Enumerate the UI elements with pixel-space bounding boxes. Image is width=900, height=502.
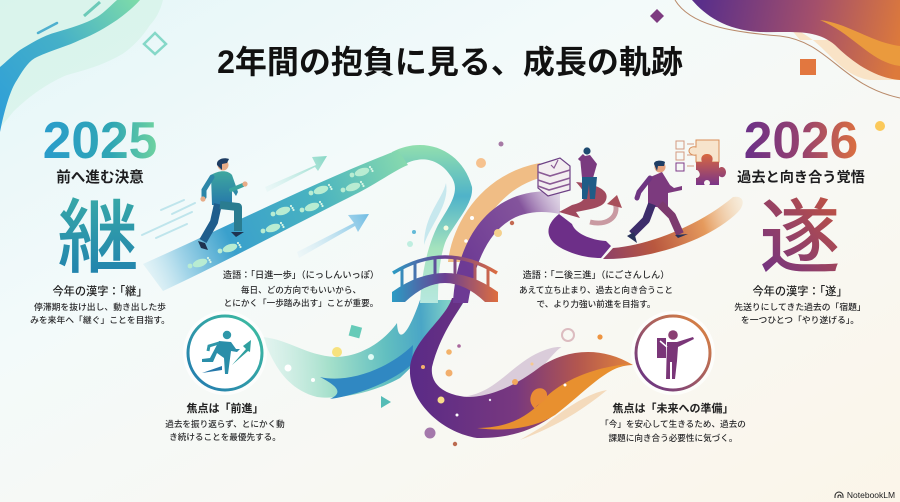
kanji note 2026 xyxy=(734,284,866,325)
text: focus preparation: 課題に向き合う必要性に気づく。 xyxy=(609,432,737,443)
small return arrow xyxy=(590,202,616,223)
text: idiom 2025: 毎日、どの方向でもいいから、 xyxy=(241,284,361,295)
footprints xyxy=(188,166,374,269)
text: idiom 2025: とにかく「一歩踏み出す」ことが重要。 xyxy=(224,297,378,308)
ribbon wisp xyxy=(424,183,447,245)
title: 2年間の抱負に見る、成長の軌跡 xyxy=(217,44,683,80)
kanji note 2025: みを来年へ「継ぐ」ことを目指す。 xyxy=(30,314,170,325)
text: idiom 2025 xyxy=(223,269,379,308)
icon: checklist xyxy=(676,141,694,171)
text: idiom 2026: あえて立ち止まり、過去と向き合うこと xyxy=(519,284,673,295)
spiral purple bend xyxy=(548,214,611,258)
road with footprints xyxy=(143,150,408,291)
text: focus preparation: 焦点は「未来への準備」 xyxy=(612,401,734,415)
subtitle 2025: 前へ進む決意 xyxy=(56,168,144,186)
kanji note 2026: 先送りにしてきた過去の「宿題」 xyxy=(734,301,866,312)
kanji note 2025: 停滞期を抜け出し、動き出した歩 xyxy=(34,301,166,312)
watermark: NotebookLM: NotebookLM xyxy=(847,490,895,500)
text: idiom 2025: 造語：「日進一歩」（にっしんいっぽ） xyxy=(223,269,379,280)
text: focus preparation: 「今」を安心して生きるため、過去の xyxy=(600,418,746,429)
kanji note 2026: 今年の漢字：「遂」 xyxy=(752,284,848,298)
text: focus forward xyxy=(165,401,285,442)
text: focus forward: き続けることを最優先する。 xyxy=(169,431,281,442)
pale wave xyxy=(460,347,561,410)
text: focus forward: 過去を振り返らず、とにかく動 xyxy=(165,418,285,429)
icon: bridge xyxy=(392,257,498,302)
ribbon: lower left teal swoosh xyxy=(263,300,465,399)
panel: 2026 heading xyxy=(734,111,866,325)
icon: puzzle xyxy=(689,140,726,186)
kanji note 2025: 今年の漢字：「継」 xyxy=(52,284,148,298)
chart: spiral path xyxy=(548,182,743,259)
kanji 遂: 遂 xyxy=(759,194,841,284)
spiral upper platform xyxy=(559,182,607,218)
chart: ribbon path teal xyxy=(142,145,472,303)
text: focus forward: 焦点は「前進」 xyxy=(186,401,264,415)
kanji 継: 継 xyxy=(57,194,139,284)
decoration: top-right brush swoosh xyxy=(675,0,900,98)
arrow: upper xyxy=(265,156,327,192)
icon: walking person right xyxy=(627,161,688,243)
subtitle 2026: 過去と向き合う覚悟 xyxy=(737,169,865,186)
text: idiom 2026: 造語：「二後三進」（にごさんしん） xyxy=(523,269,669,280)
icon: thinking person xyxy=(579,147,597,199)
ribbon: upper purple arc xyxy=(407,142,560,303)
text: idiom 2026: で、より力強い前進を目指す。 xyxy=(537,298,655,309)
icon: books xyxy=(538,158,570,196)
year 2026: 2026 xyxy=(744,111,858,169)
speed lines xyxy=(142,200,195,238)
icon: focus preparation xyxy=(631,311,715,395)
spiral band xyxy=(603,197,743,259)
arrow: lower xyxy=(297,214,369,258)
decoration: small shapes xyxy=(144,9,885,408)
icon: focus forward xyxy=(183,311,267,395)
ribbon loop xyxy=(392,145,472,303)
kanji note 2025 xyxy=(30,284,170,325)
text: focus preparation xyxy=(600,401,746,443)
year 2025: 2025 xyxy=(43,111,157,169)
icon: running person left xyxy=(198,158,248,250)
ribbon: purple river xyxy=(410,298,633,446)
text: idiom 2026 xyxy=(519,269,673,309)
panel: 2025 heading xyxy=(30,111,170,325)
kanji note 2026: を一つひとつ「やり遂げる」。 xyxy=(741,314,859,325)
decoration: top-left brush swoosh xyxy=(0,0,163,132)
